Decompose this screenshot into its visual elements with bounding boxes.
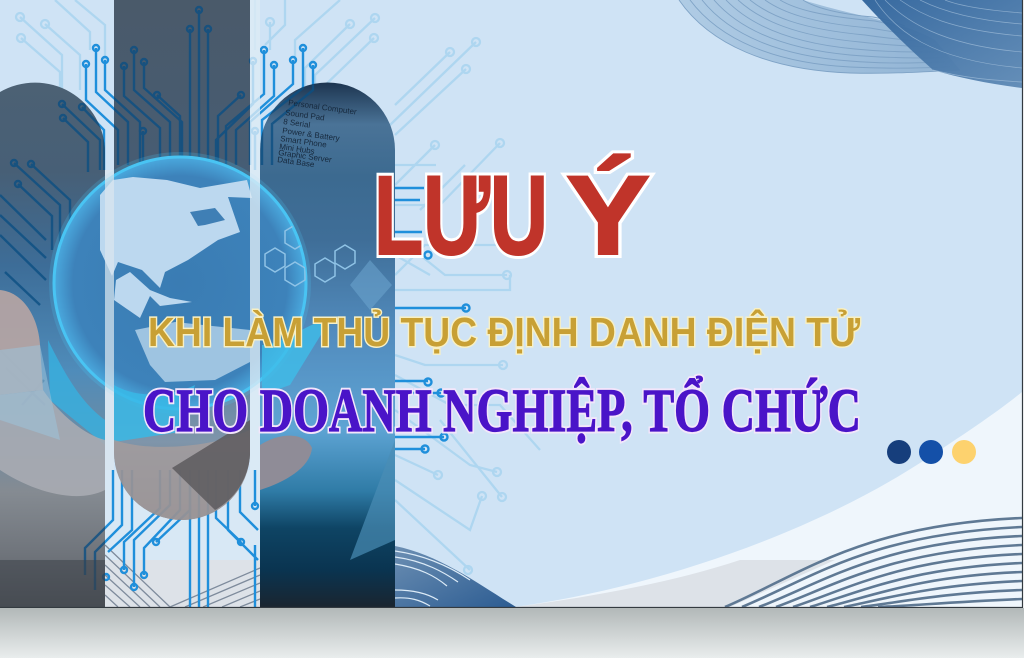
column 3 screen text: 8 Serial [283, 117, 311, 130]
bottom panel between columns [105, 470, 260, 607]
column 3 lighter triangle [350, 440, 395, 560]
column 3 screen text: Smart Phone [280, 134, 328, 150]
column 3 screen text: Personal Computer [288, 98, 358, 117]
bright circuit lines [82, 44, 471, 607]
hudson bay [190, 208, 225, 226]
ribbon: dark lines top right [862, 0, 1022, 88]
hand [0, 290, 312, 520]
column 3 diamond [350, 260, 392, 310]
column 3 screen text: Sound Pad [285, 108, 325, 122]
cyan glow of hand [48, 320, 330, 445]
title: lưu ý: Ý [566, 153, 650, 278]
white wave [515, 392, 1022, 607]
title: lưu ý: LƯU [374, 153, 548, 278]
column 3 screen text: Mini Hubs [279, 142, 315, 156]
continent: south america [135, 322, 250, 382]
column 1 lower stripes [0, 560, 105, 607]
globe [49, 152, 311, 414]
decorative dots [887, 440, 976, 464]
column 3 screen text: Graphic Server [278, 148, 333, 165]
continent: north america [100, 177, 252, 288]
ribbon: light lines top right [679, 0, 960, 73]
dark wave bottom centre [395, 546, 516, 607]
hexagons [265, 225, 305, 286]
column 3 screen text: Data Base [277, 155, 316, 169]
photo column 3 [260, 82, 395, 607]
subtitle: khi làm thủ tục định danh điện tử: KHI LÀM THỦ TỤC ĐỊNH DANH ĐIỆN TỬ [148, 309, 861, 355]
grey floor band [515, 560, 835, 607]
title: lưu ý: LƯU [374, 153, 548, 278]
column 3 screen text: Power & Battery [282, 126, 340, 143]
column 3 screen text [277, 98, 358, 169]
photo column 2 [114, 0, 250, 520]
grey floor below slide [0, 608, 1024, 658]
title: lưu ý: Ý [566, 153, 650, 278]
photo column 1 [0, 83, 105, 607]
gap stripes [105, 0, 260, 470]
dark circuit lines inside columns [0, 6, 314, 590]
wave lines bottom right [725, 518, 1022, 607]
continent: central america [114, 272, 192, 318]
hexagons beyond globe [315, 245, 355, 282]
pale circuit lines [16, 0, 540, 574]
